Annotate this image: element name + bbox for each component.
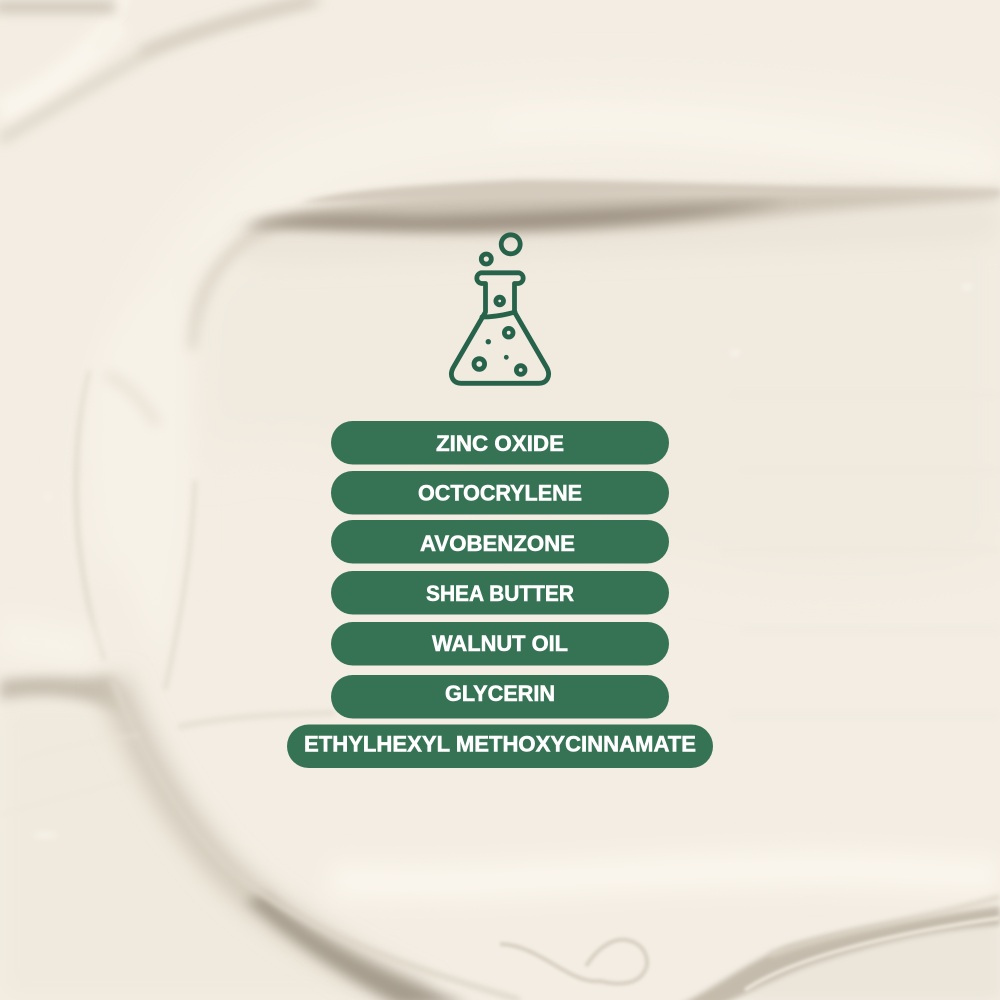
left strip bright fill: [95, 280, 187, 660]
swept bright band: [129, 124, 1000, 560]
pill: glycerin: [331, 675, 669, 718]
right-lower outside tone: [720, 915, 1000, 1000]
cream dimple: [500, 940, 647, 984]
small bubble: [481, 254, 491, 264]
inner bubbles: [474, 297, 525, 374]
pill: walnut oil: [331, 622, 669, 666]
pill: zinc oxide: ZINC OXIDE: [436, 431, 564, 456]
top-left streak: shadow: [0, 0, 320, 140]
pill: avobenzone: AVOBENZONE: [420, 531, 575, 556]
bottom right dark sweep: [680, 906, 1000, 1000]
left strip inner crease: [165, 480, 195, 690]
faint horizontal striations: [0, 395, 1000, 815]
pill: walnut oil: WALNUT OIL: [432, 631, 568, 656]
liquid line: [482, 312, 515, 317]
inner arch soft edge: [190, 225, 275, 350]
left fold shadow: [0, 675, 124, 712]
ingredient list: [287, 421, 713, 768]
pill: shea butter: SHEA BUTTER: [426, 581, 574, 606]
left fold bright above: [0, 635, 95, 650]
top-left bright stem: [95, 0, 125, 50]
pill: ethylhexyl methoxycinnamate: [287, 724, 713, 768]
pill: zinc oxide: [331, 421, 669, 464]
pill: ethylhexyl methoxycinnamate: ETHYLHEXYL METHOXYCINNAMATE: [304, 732, 696, 756]
pill: octocrylene: OCTOCRYLENE: [418, 480, 582, 506]
pill: shea butter: [331, 571, 669, 614]
lower-left outside tone: [0, 700, 400, 1000]
left strip dimple: [105, 375, 158, 425]
bottom arc soft shadow: [113, 680, 425, 1000]
top ridge: wide soft shadow: [250, 188, 1000, 232]
icon: flask with bubbles: [451, 235, 549, 383]
left strip outer edge: [76, 370, 104, 660]
large bubble: [501, 235, 520, 254]
pill: octocrylene: [331, 471, 669, 514]
top ridge: light grey upper band: [300, 180, 1000, 203]
bottom arc dark core: [245, 895, 470, 1000]
bottom arc fine edge: [113, 680, 520, 1000]
horizontal crease: [178, 713, 335, 727]
cream specks: [33, 284, 972, 837]
inner tray tone: [195, 200, 1000, 576]
top-left streak: highlight: [0, 22, 118, 112]
pill: avobenzone: [331, 520, 669, 564]
flask body and lip: [451, 273, 549, 383]
pill: glycerin: GLYCERIN: [445, 681, 555, 706]
top ridge: dark core: [240, 202, 790, 231]
bottom bright band: [330, 869, 1000, 883]
top-left dark band: [0, 2, 118, 12]
top ridge: highlight above: [500, 120, 1000, 168]
